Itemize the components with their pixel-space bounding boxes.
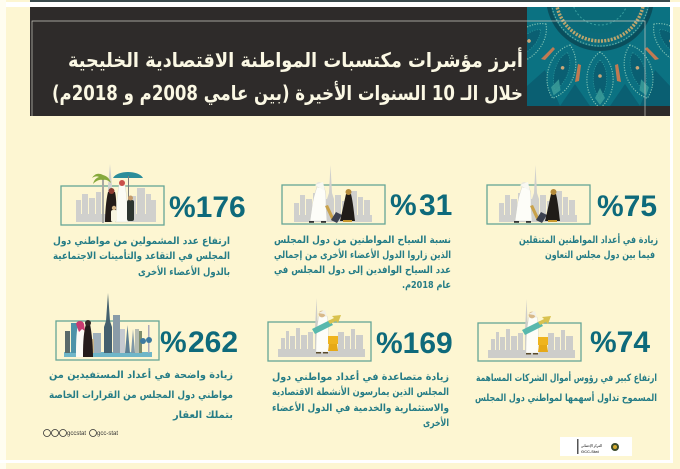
description	[519, 233, 658, 261]
title: أبرز مؤشرات مكتسبات المواطنة الاقتصادية الخليجية	[68, 46, 523, 72]
panel: 75% travelling citizens	[487, 165, 658, 261]
logo: المركز الإحصائي	[581, 443, 602, 449]
description: فيما بين دول مجلس التعاون	[545, 250, 655, 261]
social media handles: gccstat	[67, 431, 86, 437]
description	[49, 368, 233, 421]
header banner	[30, 0, 680, 116]
description: نسبة السياح المواطنين من دول المجلس	[274, 235, 451, 246]
description	[53, 236, 230, 278]
description: زيادة واضحة في أعداد المستفيدين من	[49, 368, 233, 381]
logo	[560, 437, 632, 456]
thin frame lines	[32, 21, 645, 116]
number 262: %	[160, 326, 187, 359]
description: مواطني دول المجلس من القرارات الخاصة	[49, 390, 233, 401]
description: بالدول الأعضاء الأخرى	[138, 265, 230, 278]
number 262: 262	[188, 326, 238, 359]
panel: 262% real estate	[44, 293, 238, 437]
description	[475, 371, 657, 404]
illustration: businessman with arrow and skyline	[478, 299, 581, 361]
description: المجلس الذين يمارسون الأنشطة الاقتصادية	[272, 385, 449, 398]
illustration: travellers and skyline	[487, 165, 590, 224]
description: بتملك العقار	[172, 410, 233, 421]
number 75: %75	[597, 190, 657, 223]
panel: 74% share capital	[475, 299, 657, 456]
illustration: businessman with arrow and skyline	[268, 298, 371, 361]
description: المجلس في التقاعد والتأمينات الاجتماعية	[53, 249, 230, 262]
description: والاستثمارية والخدمية في الدول الأعضاء	[272, 401, 449, 414]
number 31: %	[390, 189, 417, 222]
illustration: family under umbrella with skyline	[61, 164, 164, 225]
description	[272, 370, 449, 429]
title	[52, 46, 523, 106]
description: الأخرى	[423, 416, 449, 429]
illustration: couple and colourful skyline	[56, 293, 159, 360]
description: ارتفاع عدد المشمولين من مواطني دول	[53, 236, 230, 247]
social media handles: gcc-stat	[97, 431, 118, 437]
description: زيادة متصاعدة في أعداد مواطني دول	[272, 370, 449, 383]
number 176: %176	[169, 191, 246, 224]
teal ornamental pattern	[497, 0, 680, 108]
title: خلال الـ 10 السنوات الأخيرة (بين عامي 2008م و 2018م)	[52, 80, 523, 106]
number 74: %74	[590, 326, 650, 359]
description	[274, 235, 451, 291]
description: الذين زاروا الدول الأعضاء الأخرى من إجمالي	[274, 248, 451, 261]
panel: 176% insured	[53, 164, 246, 278]
number 31: 31	[419, 189, 452, 222]
logo: GCC-Stat	[581, 449, 599, 454]
illustration: tourists and skyline	[282, 165, 385, 224]
description: عدد السياح الوافدين إلى دول المجلس في	[274, 265, 451, 276]
description: عام 2018م.	[402, 280, 451, 291]
social media handles	[44, 430, 118, 437]
panel: 31% tourists	[274, 165, 452, 291]
panel: 169% business activity	[268, 298, 453, 429]
number 169: %169	[376, 327, 453, 360]
